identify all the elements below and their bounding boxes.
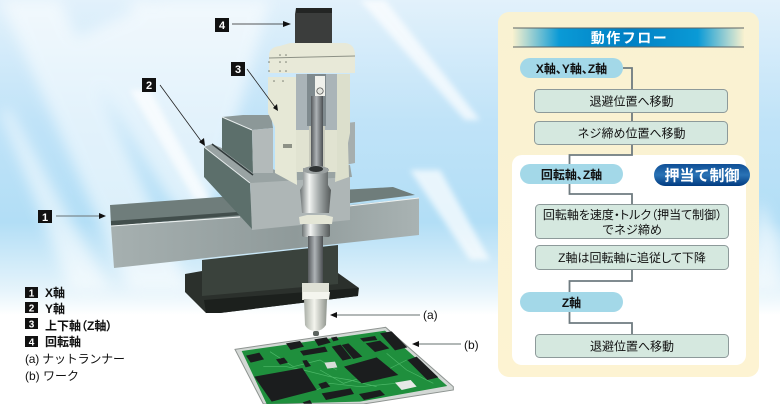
- callout 4: rotation axis: 4: [219, 20, 226, 32]
- legend: 上下軸（Z軸）: [45, 318, 112, 333]
- step: tighten: でネジ締め: [602, 223, 662, 237]
- chips: [246, 331, 438, 404]
- motor: [295, 8, 332, 43]
- badge: press control: [654, 164, 750, 186]
- flow heading: [513, 28, 744, 47]
- step: XYZ axes: X軸、Y軸、Z軸: [536, 61, 607, 76]
- callout b: work: (b): [464, 338, 479, 352]
- step: XYZ axes: [520, 58, 623, 78]
- step: Z axis: [520, 292, 623, 312]
- badge: press control: 押当て制御: [664, 166, 740, 184]
- callout 1: X axis: 1: [42, 212, 48, 224]
- step: retract: 退避位置へ移動: [589, 94, 674, 108]
- step: Z axis: Z軸: [562, 295, 581, 310]
- step: Z follows: Z軸は回転軸に追従して下降: [558, 250, 706, 265]
- legend: 回転軸: [45, 334, 81, 349]
- base pedestal: [185, 245, 359, 313]
- legend: (b) ワーク: [25, 369, 79, 383]
- nut runner: [302, 283, 330, 336]
- step: move to screw position: ネジ締め位置へ移動: [577, 126, 686, 140]
- legend: 2: [29, 304, 35, 314]
- callout b: work: [412, 338, 479, 352]
- legend: 4: [29, 338, 35, 348]
- step: tighten: [536, 204, 728, 238]
- ball joint and rod: [311, 76, 325, 168]
- step: final retract: 退避位置へ移動: [590, 340, 674, 354]
- circuit board: [235, 327, 453, 404]
- step: Z follows: [536, 246, 728, 270]
- legend: X軸: [45, 285, 65, 300]
- Y axis block: [204, 115, 355, 230]
- flow heading: 動作フロー: [591, 30, 668, 46]
- legend: [25, 285, 125, 383]
- callout a: nut runner: (a): [423, 308, 438, 322]
- step: tighten: 回転軸を速度・トルク（押当て制御）: [543, 207, 722, 222]
- flow connector lines: [570, 68, 632, 334]
- Z axis carriage: [268, 43, 355, 185]
- legend: (a) ナットランナー: [25, 352, 125, 366]
- step: rotation and Z axes: [520, 164, 623, 184]
- callout 1: X axis: [38, 210, 106, 224]
- X axis beam: [110, 187, 419, 268]
- step: final retract: [536, 334, 728, 358]
- panel: operation flow: [498, 12, 759, 377]
- step: retract: [534, 90, 728, 112]
- chuck and collar: [299, 166, 333, 283]
- callout 2: Y axis: 2: [146, 80, 152, 92]
- machine illustration: [110, 43, 419, 336]
- callout 2: Y axis: [142, 78, 205, 146]
- callout 3: vertical axis: [231, 62, 278, 111]
- step: move to screw position: [534, 122, 728, 144]
- legend: 3: [29, 320, 35, 330]
- white panel: press control section: [512, 155, 746, 365]
- legend: Y軸: [45, 301, 65, 316]
- step: rotation and Z axes: 回転軸、Z軸: [541, 167, 602, 182]
- callout 3: vertical axis: 3: [235, 64, 241, 76]
- callout 4: rotation axis: [215, 18, 291, 32]
- legend: 1: [29, 288, 35, 300]
- callout a: nut runner: [330, 308, 438, 322]
